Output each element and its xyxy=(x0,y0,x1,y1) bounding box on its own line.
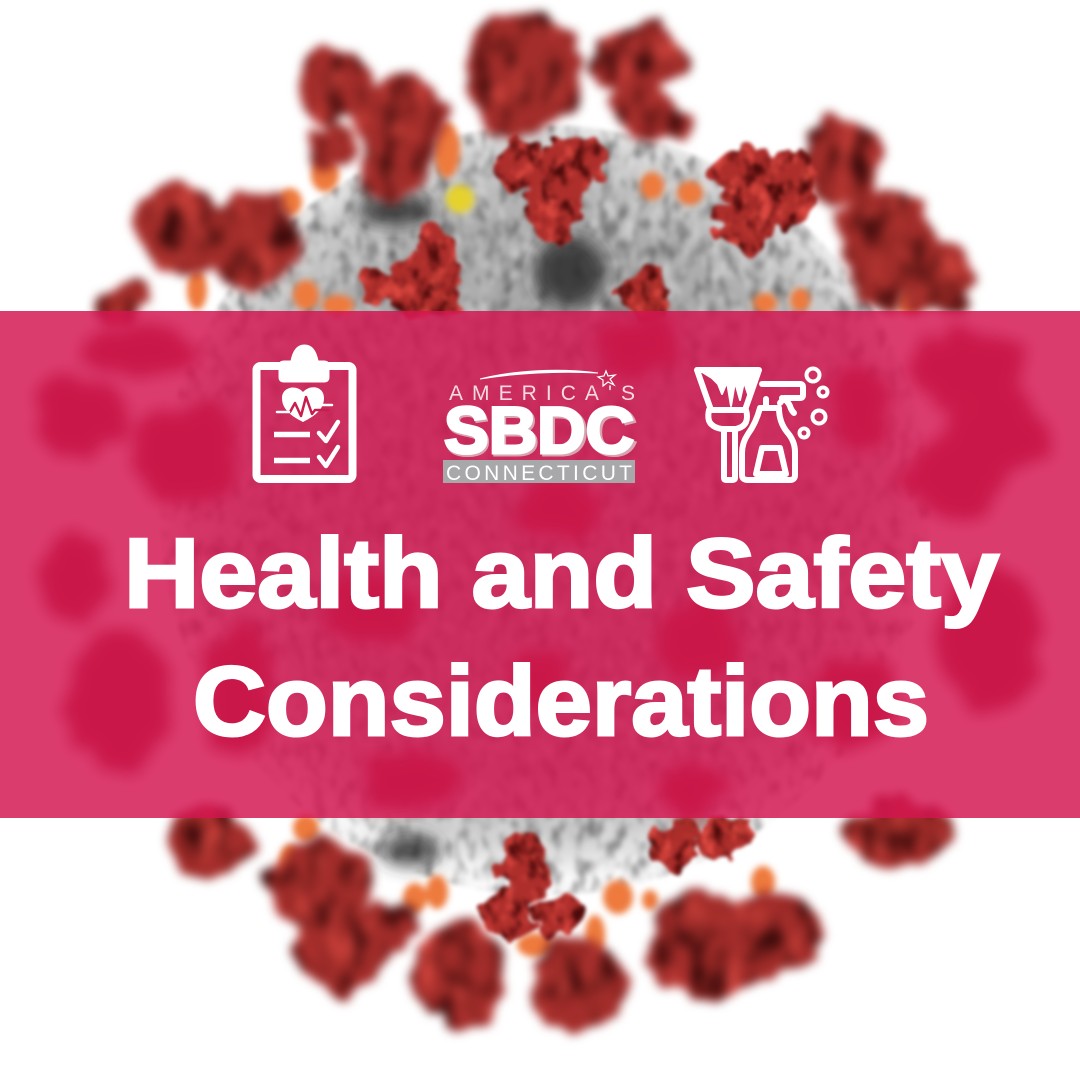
sharp spike proteins xyxy=(358,135,816,937)
icon: broom and spray bottle xyxy=(697,368,828,480)
spray bottle xyxy=(742,384,803,480)
logo text: America's: AMERICA'S xyxy=(449,382,635,405)
logo band: Connecticut: CONNECTICUT xyxy=(446,462,632,485)
title line 1: Health and Safety xyxy=(124,518,999,628)
logo text: SBDC: SBDC xyxy=(444,393,634,467)
pink banner xyxy=(0,311,1080,818)
broom xyxy=(697,370,759,480)
spikes hidden behind the banner xyxy=(32,317,1048,816)
yellow protein xyxy=(446,185,474,213)
icon: clipboard with heartbeat and checklist xyxy=(256,345,352,479)
title xyxy=(124,518,999,756)
title line 2: Considerations xyxy=(193,646,929,756)
logo swoosh and star xyxy=(480,370,615,386)
virus body xyxy=(160,125,930,895)
blurred spike proteins xyxy=(96,15,976,1032)
logo: America's SBDC Connecticut xyxy=(443,370,637,485)
orange surface proteins xyxy=(187,122,919,957)
logo text: SBDC: SBDC xyxy=(445,395,637,469)
bubbles xyxy=(800,368,828,438)
